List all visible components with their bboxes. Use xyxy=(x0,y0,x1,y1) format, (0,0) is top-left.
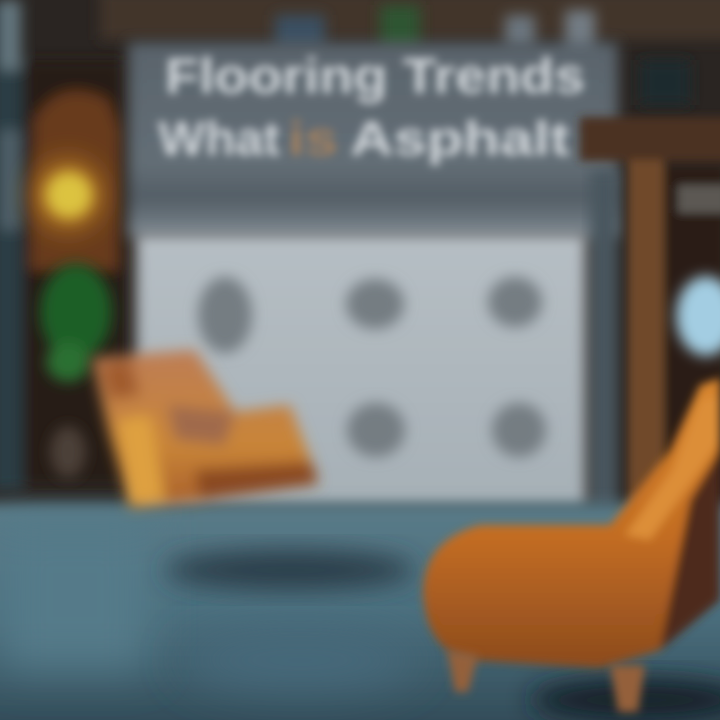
floor carpet xyxy=(0,503,720,720)
blurred title text: What xyxy=(158,113,280,166)
blurred title text: Asphalt xyxy=(350,113,570,166)
chair legs xyxy=(447,650,645,712)
blurred title text: Flooring Trends xyxy=(165,48,585,104)
tile pattern spots xyxy=(198,277,546,457)
blurred title text xyxy=(158,48,585,166)
right orange chair xyxy=(423,378,720,712)
wall lamp xyxy=(32,159,104,231)
white panel with tiles xyxy=(136,234,586,508)
left orange chair xyxy=(92,350,318,508)
plant xyxy=(40,264,112,478)
wooden shelf and post xyxy=(580,117,720,505)
back wall xyxy=(128,42,618,237)
blurred title text: is xyxy=(288,113,338,166)
right dark pillar xyxy=(590,170,618,510)
blue window glow xyxy=(676,276,720,356)
top decor on ceiling shelf xyxy=(275,5,690,105)
left wooden column xyxy=(0,0,124,490)
